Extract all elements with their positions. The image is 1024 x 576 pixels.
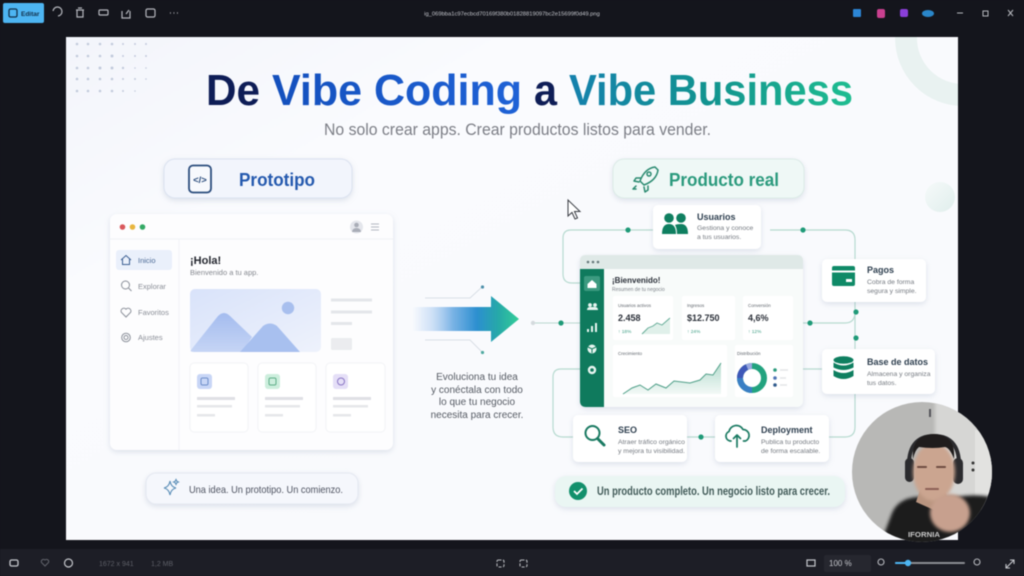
title: De xyxy=(206,66,260,115)
hair xyxy=(913,434,954,459)
card: Pagos: segura y simple. xyxy=(867,288,917,295)
decorative ring xyxy=(895,37,958,106)
face xyxy=(913,443,955,501)
metric: usuarios activos: 2.458 xyxy=(618,313,641,323)
callout: product caption xyxy=(555,476,845,507)
text: arrow caption: necesita para crecer. xyxy=(431,410,523,421)
sidebar menu: Explorar xyxy=(138,282,166,291)
zoom controls xyxy=(807,555,1014,572)
metric: ingresos: Ingresos xyxy=(687,303,705,308)
sidebar menu: Favoritos xyxy=(138,308,169,317)
shirt print: IFORNIA xyxy=(908,532,940,539)
card: Base de datos: Base de datos xyxy=(867,357,928,367)
greeting: Bienvenido a tu app. xyxy=(190,268,258,277)
icon: database xyxy=(834,356,854,379)
decorative bubble xyxy=(925,182,955,212)
sidebar menu: Ajustes xyxy=(138,333,163,342)
metric: conversion: 4,6% xyxy=(748,313,769,323)
center icons xyxy=(497,560,527,567)
webcam overlay xyxy=(850,400,996,545)
metric: conversion xyxy=(748,303,771,334)
dashboard sidebar xyxy=(580,269,604,407)
status left icons and metadata: 1,2 MB xyxy=(151,561,174,568)
card: SEO: SEO xyxy=(618,425,637,435)
line chart: crecimiento: Crecimiento xyxy=(618,351,643,356)
heading: Producto real xyxy=(613,159,804,198)
card: Pagos: Pagos xyxy=(867,265,894,275)
card: Deployment: Deployment xyxy=(761,425,813,435)
icon: code xyxy=(189,166,211,192)
icon: users xyxy=(662,213,688,234)
card: Base de datos: tus datos. xyxy=(867,380,897,387)
arrow connector lines xyxy=(425,287,580,352)
card: Usuarios xyxy=(653,205,761,249)
bottom status bar xyxy=(0,549,1024,576)
metric: usuarios activos: Usuarios activos xyxy=(618,303,652,308)
card: SEO: y mejora tu visibilidad. xyxy=(618,448,685,455)
icon: sparkle xyxy=(164,480,178,495)
title: Vibe Coding xyxy=(272,66,522,115)
facial features xyxy=(917,466,946,490)
top toolbar xyxy=(0,0,1024,37)
toolbar icons xyxy=(53,7,178,18)
window controls xyxy=(120,224,145,230)
dashboard greeting xyxy=(612,276,665,293)
icon: mouse cursor xyxy=(568,200,580,219)
greeting xyxy=(190,255,258,277)
title: a xyxy=(534,66,557,115)
wall background xyxy=(935,400,995,510)
metric: conversion: ↑ 12% xyxy=(748,329,762,335)
dot pattern xyxy=(76,43,147,92)
raised hand xyxy=(930,494,970,532)
donut chart: distribucion: Distribución xyxy=(737,351,761,356)
person torso xyxy=(880,495,996,545)
edit button: Editar xyxy=(21,11,40,18)
metric: ingresos: ↑ 24% xyxy=(687,329,701,335)
callout: prototype caption: Una idea. Un prototipo. Un comienzo. xyxy=(189,484,343,496)
card: SEO: Atraer tráfico orgánico xyxy=(618,439,685,446)
headphones xyxy=(905,436,963,484)
text: arrow caption: y conéctala con todo xyxy=(431,385,523,396)
card: Base de datos xyxy=(822,349,935,394)
arrow: evolution xyxy=(412,285,580,354)
user avatar and menu xyxy=(350,220,379,234)
sidebar menu: Inicio xyxy=(138,256,156,265)
greeting: ¡Hola! xyxy=(190,255,221,267)
dashboard greeting: Resumen de tu negocio xyxy=(612,287,665,293)
metric: conversion: Conversión xyxy=(748,303,771,308)
card: Usuarios: Usuarios xyxy=(697,212,736,222)
metric: usuarios activos: ↑ 18% xyxy=(618,329,632,335)
feature card 2 xyxy=(264,374,304,416)
icon: code: </> xyxy=(193,175,207,186)
feature card 3 xyxy=(332,374,372,416)
icon: rocket xyxy=(633,167,658,192)
panel: prototype app window xyxy=(110,214,393,450)
status left icons and metadata: 1672 x 941 xyxy=(99,561,134,568)
panel: dashboard xyxy=(580,255,803,407)
window controls xyxy=(957,10,1013,16)
card: Deployment: Publica tu producto xyxy=(761,439,819,446)
dashboard greeting: ¡Bienvenido! xyxy=(612,276,660,285)
icon: magnifier xyxy=(586,426,604,445)
zoom controls: 100 % xyxy=(829,559,852,568)
feature card 1 xyxy=(196,374,236,416)
callout: prototype caption xyxy=(146,473,358,504)
title xyxy=(208,72,852,115)
text: arrow caption xyxy=(431,372,523,421)
card: Usuarios: Gestiona y conoce xyxy=(697,225,754,232)
text: arrow caption: Evoluciona tu idea xyxy=(436,372,518,383)
heading: Producto real: Producto real xyxy=(669,170,779,190)
icon: credit card xyxy=(832,266,855,286)
sidebar menu xyxy=(116,250,172,342)
slide xyxy=(65,36,959,541)
card: Pagos xyxy=(822,259,926,302)
card: Usuarios: a tus usuarios. xyxy=(697,234,741,241)
connector lines xyxy=(553,227,859,440)
subtitle: No solo crear apps. Crear productos listos para vender. xyxy=(324,121,711,139)
card: SEO xyxy=(573,415,687,462)
card: Deployment xyxy=(715,415,829,462)
metric: ingresos xyxy=(686,304,720,334)
status left icons and metadata xyxy=(10,559,174,568)
file name: ig_069bba1c97ecbcd70169f380b01828819097bc2e15699f0d49.png xyxy=(424,12,600,18)
metric: ingresos: $12.750 xyxy=(687,313,720,323)
card: Deployment: de forma escalable. xyxy=(761,448,820,455)
title: Vibe Business xyxy=(569,66,853,115)
donut chart: distribucion xyxy=(736,351,788,394)
icon: check xyxy=(569,482,587,500)
metric: usuarios activos xyxy=(618,304,670,335)
icon: cloud upload xyxy=(726,425,749,447)
image placeholder xyxy=(190,289,321,352)
line chart: crecimiento xyxy=(618,352,722,395)
text placeholders xyxy=(331,298,372,350)
taskbar app icons xyxy=(853,9,934,18)
card: Pagos: Cobra de forma xyxy=(867,279,914,286)
card: Base de datos: Almacena y organiza xyxy=(867,371,931,378)
text: arrow caption: lo que tu negocio xyxy=(439,397,516,408)
dashboard window dots xyxy=(587,261,599,263)
edit button xyxy=(3,3,44,23)
person neck xyxy=(916,490,950,510)
heading: Prototipo xyxy=(164,159,352,198)
heading: Prototipo: Prototipo xyxy=(239,170,315,190)
callout: product caption: Un producto completo. Un negocio listo para crecer. xyxy=(597,486,830,498)
